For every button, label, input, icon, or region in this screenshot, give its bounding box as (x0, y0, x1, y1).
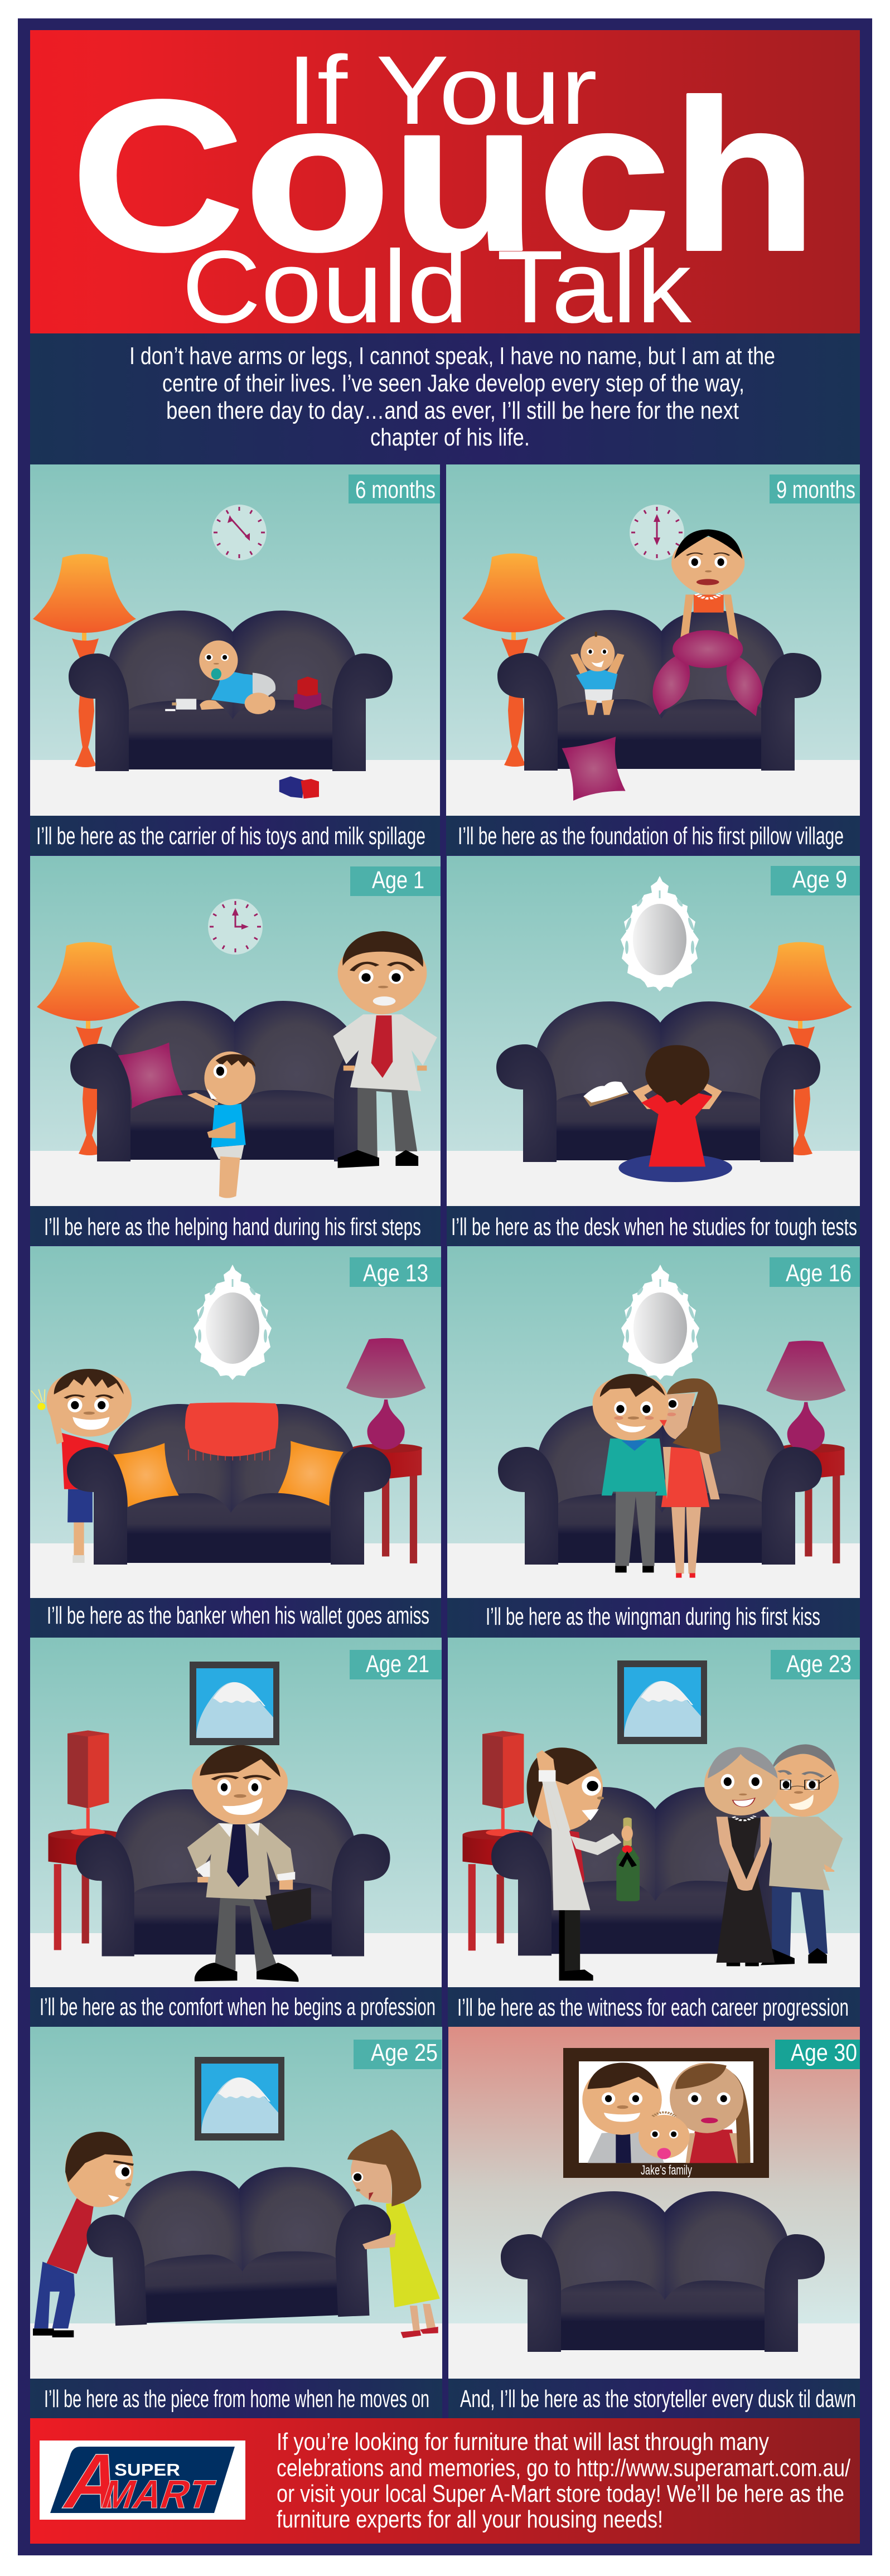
caption: first steps (30, 1206, 441, 1246)
couch tilted (84, 2163, 395, 2327)
icon: wall clock (630, 505, 684, 560)
title banner (30, 30, 860, 345)
couch (69, 611, 393, 771)
crawling baby with bottle and blocks (165, 641, 321, 798)
age tag: 6 months (355, 476, 436, 503)
caption: moves on (30, 2379, 442, 2418)
couch (67, 1404, 391, 1565)
couch (70, 1001, 394, 1161)
caption: begins a profession (30, 1987, 442, 2027)
age tag: Age 30 (791, 2039, 857, 2066)
title line: Could Talk: Could Talk (182, 230, 692, 345)
side table and lamp (463, 1731, 536, 1950)
caption: wallet goes amiss: I’ll be here as the banker when his wallet goes amiss (47, 1602, 429, 1629)
couch (497, 610, 821, 771)
woman's arms (362, 2233, 396, 2249)
panel: Age 13 (30, 1246, 441, 1598)
caption: career progression (448, 1987, 860, 2027)
call to action text: furniture experts for all your housing needs! (277, 2506, 663, 2533)
intro text block: chapter of his life. (370, 424, 530, 451)
title line: If Your: If Your (287, 36, 597, 145)
child studying with book (583, 1045, 732, 1182)
age tag: Age 1 (372, 866, 424, 894)
couch (496, 1001, 820, 1162)
ornate mirror (194, 1265, 272, 1380)
caption: toys and milk spillage: I’ll be here as the carrier of his toys and milk spillage (36, 822, 425, 850)
cushions and blanket (114, 1402, 344, 1507)
ornate mirror (621, 876, 699, 991)
father and toddler with pillow (118, 931, 437, 1198)
caption: moves on: I’ll be here as the piece from home when he moves on (44, 2385, 429, 2413)
floor lamp (33, 554, 136, 767)
couch (491, 1787, 815, 1955)
family portrait (563, 2048, 769, 2178)
age tag (775, 2039, 860, 2069)
teen couple kissing (593, 1374, 721, 1578)
caption: toys and milk spillage (30, 816, 440, 855)
intro text block (30, 333, 860, 464)
portrait caption: Jake’s family (641, 2163, 692, 2178)
logo: Super Amart: A (55, 2438, 133, 2525)
Jake raising bottle and proud parents (527, 1744, 843, 1981)
floor lamp (462, 553, 565, 767)
caption: wallet goes amiss (30, 1598, 441, 1638)
age tag: Age 25 (371, 2039, 438, 2066)
age tag: Age 23 (786, 1650, 852, 1678)
call to action text: If you’re looking for furniture that will last through many (277, 2428, 769, 2456)
panel: Age 30 (448, 2027, 860, 2379)
businessman with briefcase (187, 1745, 311, 1982)
side table and lamp (49, 1731, 122, 1950)
footer banner (30, 2418, 860, 2544)
caption: tough tests (447, 1206, 860, 1246)
logo: Super Amart (40, 2438, 245, 2525)
caption: dusk til dawn (448, 2379, 860, 2418)
panel: Age 9 (447, 856, 860, 1206)
caption: begins a profession: I’ll be here as the comfort when he begins a profession (40, 1993, 436, 2021)
logo: Super Amart: MART (96, 2472, 220, 2517)
panel: Age 16 (447, 1246, 860, 1598)
framed mountain picture (195, 2057, 284, 2141)
floor lamp (749, 942, 852, 1155)
panel: 6 months (30, 464, 440, 816)
age tag: 9 months (776, 476, 855, 503)
title line: Couch: Couch (71, 55, 818, 296)
ornate mirror (621, 1265, 699, 1380)
framed mountain picture (190, 1662, 279, 1745)
panel: Age 1 (30, 856, 441, 1206)
age tag (350, 866, 441, 896)
panel: Age 21 (30, 1638, 442, 1987)
man and woman carrying couch (33, 2129, 440, 2338)
floor lamp (37, 942, 140, 1155)
couch (501, 2191, 825, 2352)
side table and lamp (766, 1340, 846, 1563)
framed mountain picture (617, 1660, 707, 1744)
couch (76, 1789, 390, 1957)
age tag: Age 16 (786, 1260, 852, 1287)
call to action text (277, 2428, 851, 2533)
icon: wall clock (208, 899, 263, 955)
panel: Age 23 (448, 1638, 860, 1987)
portrait figures (582, 2062, 751, 2163)
mother, baby and pillows (562, 529, 762, 801)
caption: first steps: I’ll be here as the helping hand during his first steps (44, 1213, 421, 1241)
age tag (771, 866, 860, 895)
age tag: Age 21 (366, 1650, 429, 1678)
boy behind couch, side table and lamp (31, 1338, 425, 1563)
caption: first kiss (447, 1598, 860, 1638)
age tag: Age 13 (363, 1260, 428, 1287)
intro text block: centre of their lives. I’ve seen Jake develop every step of the way, (162, 370, 744, 397)
icon: wall clock (212, 505, 267, 560)
intro text block: been there day to day…and as ever, I’ll still be here for the next (166, 397, 739, 424)
age tag: Age 9 (792, 866, 847, 893)
age tag (354, 2039, 442, 2069)
couch (498, 1404, 822, 1565)
caption: first pillow village (446, 816, 860, 855)
panel: Age 25 (30, 2027, 442, 2379)
panel: 9 months (446, 464, 860, 816)
logo: Super Amart: SUPER (114, 2460, 180, 2480)
